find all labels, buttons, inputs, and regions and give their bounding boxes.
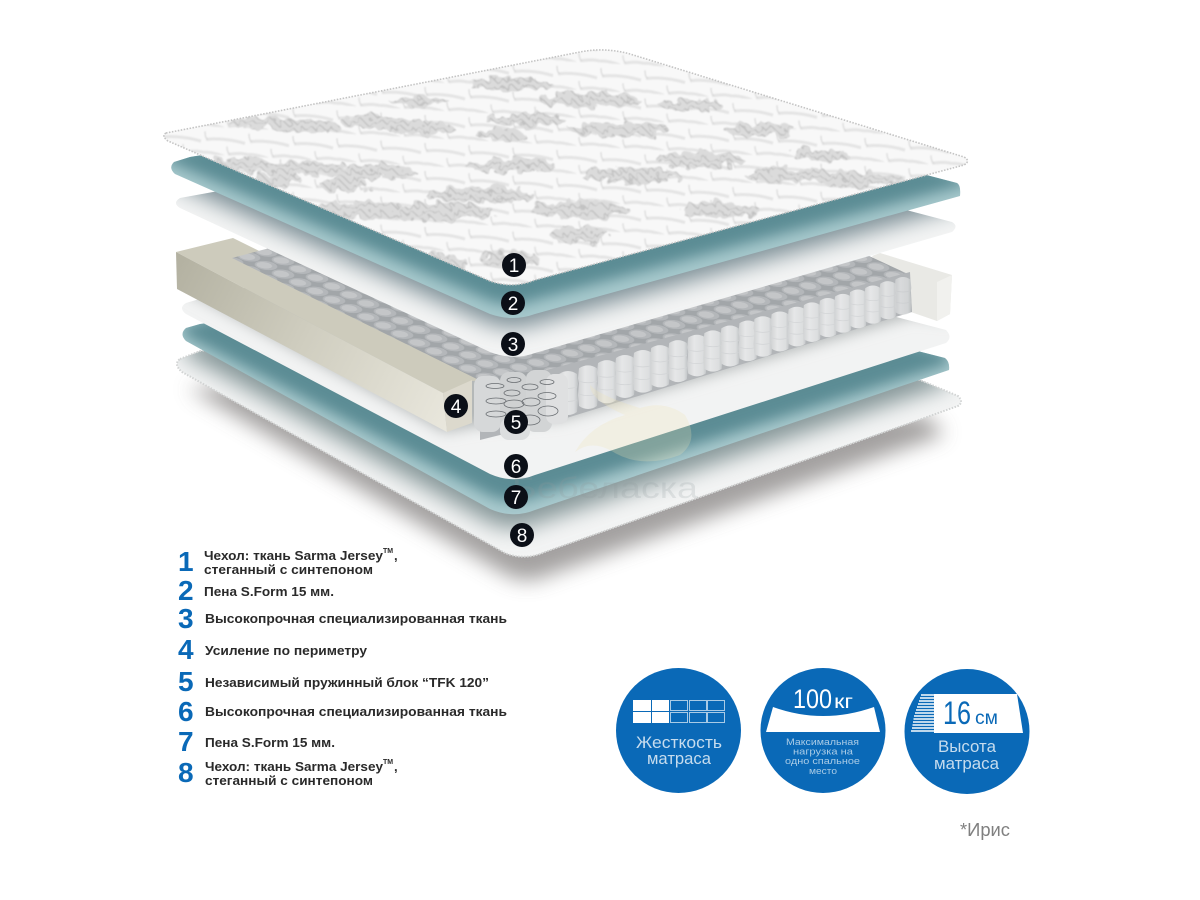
badge 6 [504,454,528,478]
number badges [444,253,534,547]
badge: firmness [616,668,741,793]
legend labels: Независимый пружинный блок “TFK 120” [205,675,489,690]
legend [178,546,507,788]
firmness grid icon [633,700,724,723]
watermark logo: Бебеласка [512,472,698,505]
badge 7 [504,485,528,509]
legend labels: Чехол: ткань Sarma Jersey [205,759,384,774]
layer 6: white fabric [182,288,950,480]
layer 4: perimeter foam, left piece [176,252,472,432]
badge 8: 8 [517,526,527,547]
badge: maximum load [760,668,886,793]
layer 1: quilted cover [163,49,968,286]
height value [943,695,998,731]
footnote: *Ирис [960,820,1010,840]
height label: Высота [938,738,997,756]
badge 5 [504,410,528,434]
load label: Максимальная [786,737,859,748]
watermark logo [512,385,698,505]
legend labels: стеганный с синтепоном [204,562,373,577]
layer 7: blue foam [182,324,950,514]
firmness label: матраса [647,750,712,768]
layer 2: blue foam [171,156,960,318]
legend labels [204,548,507,788]
badge: mattress height [904,669,1030,794]
badge 3 [501,332,525,356]
legend labels: TM [383,548,393,555]
layer 4: perimeter foam, top face [176,238,520,393]
height icon [911,694,1023,733]
cutaway coils [474,370,568,440]
height value: см [975,708,998,729]
legend numbers: 1 [178,546,194,577]
layer 3: high strength fabric [176,192,956,357]
badge 4 [444,394,468,418]
legend labels: Пена S.Form 15 мм. [204,584,334,599]
legend labels: Высокопрочная специализированная ткань [205,611,507,626]
layer 5: spring block [232,150,912,440]
firmness label [636,734,722,768]
spring gaps [480,272,912,440]
badge 8 [510,523,534,547]
badge 2: 2 [508,294,518,315]
load label [785,737,860,777]
legend labels: стеганный с синтепоном [205,773,373,788]
load label: нагрузка на [793,746,854,758]
legend numbers: 6 [178,696,194,727]
badge 5: 5 [511,413,521,434]
legend numbers: 4 [178,634,194,665]
badge 3: 3 [508,335,518,356]
badge 7: 7 [511,488,521,509]
load label: одно спальное [785,756,860,767]
badge 4: 4 [451,397,462,418]
legend numbers: 3 [178,603,194,634]
height value: 16 [943,695,971,731]
badge 2 [501,291,525,315]
pocket springs row [558,277,911,415]
badge 1: 1 [509,256,519,277]
legend numbers: 2 [178,575,194,606]
load label: место [809,766,837,777]
legend labels: , [394,548,398,563]
badge 1 [502,253,526,277]
pillow icon [766,707,880,732]
height label [934,738,1000,773]
legend numbers [178,546,194,788]
legend numbers: 7 [178,726,194,757]
badge 6: 6 [511,457,521,478]
firmness label: Жесткость [636,734,722,752]
legend labels: Пена S.Form 15 мм. [205,735,335,750]
load value: кг [834,692,853,713]
legend numbers: 5 [178,666,194,697]
load value: 100 [793,684,832,714]
spring tops [232,150,908,388]
shadow under mattress [188,380,945,580]
infographic: mattress layers [163,49,1030,840]
layer 4: perimeter foam, right piece [872,253,952,321]
legend labels: Чехол: ткань Sarma Jersey [204,548,384,563]
legend numbers: 8 [178,757,194,788]
legend labels: , [394,759,398,774]
height label: матраса [934,755,1000,773]
legend labels: Высокопрочная специализированная ткань [205,704,507,719]
legend labels: Усиление по периметру [205,643,368,658]
legend labels: TM [383,759,393,766]
layer 8: bottom cover [176,350,962,558]
